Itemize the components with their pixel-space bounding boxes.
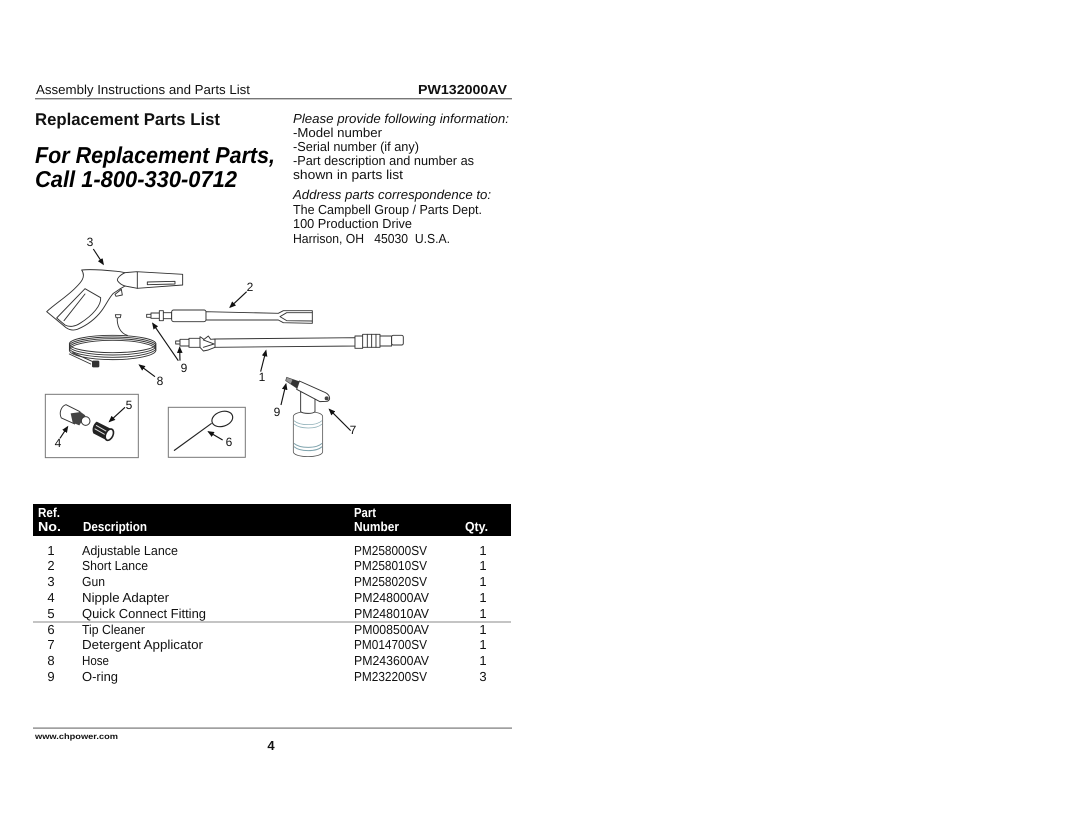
callout numbers: 9 [181, 361, 188, 375]
callout numbers: 4 [55, 436, 62, 450]
row 6: 6 [47, 622, 55, 637]
callout numbers: 1 [259, 370, 266, 384]
text block: information to provide: -Model number [293, 125, 383, 140]
text block: correspondence address: Address parts correspondence to: [292, 187, 491, 202]
row 8 [47, 653, 487, 668]
row 9: 9 [47, 669, 55, 684]
text block: information to provide: shown in parts list [293, 167, 403, 182]
page header: PW132000AV [418, 82, 507, 97]
callout numbers: 3 [87, 235, 94, 249]
text block: information to provide [293, 111, 509, 182]
table header: Number [354, 519, 399, 534]
row 8: 1 [479, 653, 487, 668]
row 4: Nipple Adapter [82, 590, 170, 605]
text block: information to provide: -Serial number (if any) [293, 139, 419, 154]
row 8: 8 [47, 653, 55, 668]
icon box: nipple adapter and quick connect fitting [45, 394, 138, 458]
row 8: Hose [82, 653, 109, 668]
text block: information to provide: Please provide following information: [293, 111, 509, 126]
text block: correspondence address: 100 Production Drive [293, 216, 412, 231]
callout: replacement parts phone number: Call 1-800-330-0712 [35, 166, 237, 192]
parts table [33, 504, 511, 684]
row 5: 1 [479, 606, 487, 621]
row 9: O-ring [82, 669, 118, 684]
callout numbers: 5 [126, 398, 133, 412]
arrows: callout pointers [60, 249, 351, 440]
icon: detergent applicator [286, 377, 330, 457]
page header: Assembly Instructions and Parts List [36, 82, 250, 97]
row 5: Quick Connect Fitting [82, 606, 206, 621]
page footer: www.chpower.com [34, 732, 118, 741]
row 6: PM008500AV [354, 622, 429, 637]
row 1: PM258000SV [354, 543, 427, 558]
text block: correspondence address: Harrison, OH 45030 U.S.A. [293, 231, 450, 246]
page header [35, 82, 512, 99]
row 2 [47, 558, 487, 573]
icon: adjustable lance [176, 334, 403, 351]
text block: correspondence address [292, 187, 491, 246]
row 3: 3 [47, 574, 55, 589]
row 4: 4 [47, 590, 55, 605]
icon: short lance [147, 310, 312, 323]
table header: Part [354, 505, 377, 520]
row 7: 7 [47, 637, 55, 652]
row 1: 1 [47, 543, 55, 558]
row 1 [47, 543, 487, 558]
callout numbers: 6 [226, 435, 233, 449]
row 4: PM248000AV [354, 590, 429, 605]
row 3 [47, 574, 487, 589]
text block: correspondence address: The Campbell Group / Parts Dept. [293, 202, 482, 217]
callout numbers: 7 [350, 423, 357, 437]
row 3: Gun [82, 574, 105, 589]
row 9 [47, 669, 487, 684]
row 9: PM232200SV [354, 669, 427, 684]
table header: No. [38, 519, 61, 534]
row 6: 1 [479, 622, 487, 637]
text block: information to provide: -Part description and number as [293, 153, 474, 168]
table header: Ref. [38, 505, 60, 520]
row 2: 2 [47, 558, 55, 573]
row 2: Short Lance [82, 558, 148, 573]
page footer [33, 728, 512, 753]
row 7: Detergent Applicator [82, 637, 204, 652]
table header: Description [83, 519, 147, 534]
row 3: 1 [479, 574, 487, 589]
table header [33, 504, 511, 536]
row 7 [47, 637, 487, 652]
row 7: 1 [479, 637, 487, 652]
icon box: tip cleaner [168, 407, 245, 457]
row 5: PM248010AV [354, 606, 429, 621]
table header: Qty. [465, 519, 488, 534]
row 2: PM258010SV [354, 558, 427, 573]
row 4 [47, 590, 487, 605]
row 5: 5 [47, 606, 55, 621]
row 3: PM258020SV [354, 574, 427, 589]
row 4: 1 [479, 590, 487, 605]
heading: replacement parts list: Replacement Parts List [35, 110, 220, 129]
parts diagram [45, 235, 403, 458]
row 9: 3 [479, 669, 487, 684]
row 6: Tip Cleaner [82, 622, 146, 637]
row 1: Adjustable Lance [82, 543, 178, 558]
row 8: PM243600AV [354, 653, 429, 668]
row 7: PM014700SV [354, 637, 427, 652]
row 5 [47, 606, 487, 621]
callout: replacement parts phone number: For Replacement Parts, [35, 142, 275, 168]
row 2: 1 [479, 558, 487, 573]
icon: hose [69, 315, 156, 367]
callout numbers: 2 [247, 280, 254, 294]
page footer: 4 [267, 738, 275, 753]
row 1: 1 [479, 543, 487, 558]
callout: replacement parts phone number [35, 142, 275, 192]
callout numbers: 8 [157, 374, 164, 388]
callout numbers [55, 235, 357, 450]
row 6 [47, 622, 487, 637]
callout numbers: 9 [274, 405, 281, 419]
icon: spray gun [47, 270, 183, 330]
